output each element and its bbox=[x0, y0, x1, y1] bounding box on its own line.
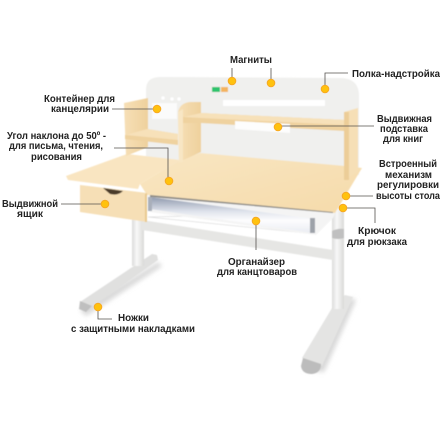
orange tag bbox=[221, 87, 228, 92]
crossbar bbox=[142, 220, 333, 260]
label: hook: Крючок bbox=[358, 226, 397, 237]
callout lines bbox=[61, 68, 375, 319]
label: tilt angle: для письма, чтения, bbox=[9, 141, 103, 152]
label: tilt angle: рисования bbox=[31, 152, 82, 163]
foot shadows bbox=[80, 262, 356, 372]
left shelf side bbox=[124, 98, 148, 156]
white container bbox=[152, 103, 177, 119]
magnet dots bbox=[161, 96, 181, 101]
right leg and foot bbox=[301, 205, 353, 374]
label: book stand: для книг bbox=[383, 134, 423, 145]
label: hook: для рюкзака bbox=[347, 237, 407, 248]
drawer bbox=[80, 185, 147, 222]
desk top left panel bbox=[66, 154, 180, 189]
label: height mechanism: механизм bbox=[385, 170, 432, 181]
label: magnets: Магниты bbox=[230, 55, 272, 66]
right shelf side bbox=[178, 102, 201, 162]
organizer tray bbox=[148, 213, 331, 234]
back panel bbox=[146, 77, 359, 175]
label: legs bbox=[71, 313, 195, 335]
label: book stand bbox=[377, 114, 432, 145]
label: organizer bbox=[217, 257, 297, 278]
label: shelf: Полка-надстройка bbox=[352, 69, 440, 80]
right shelf leg bbox=[344, 108, 358, 180]
callout dots bbox=[94, 77, 350, 311]
white stripe bbox=[223, 100, 325, 106]
upper shelf board bbox=[183, 113, 345, 131]
label: container: канцелярии bbox=[51, 104, 109, 115]
label: height mechanism: Встроенный bbox=[379, 159, 437, 170]
label: drawer: Выдвижной bbox=[2, 199, 58, 210]
label: drawer: ящик bbox=[17, 209, 44, 220]
label: book stand: Выдвижная bbox=[377, 114, 432, 125]
middle shelf bbox=[125, 129, 178, 145]
left leg and foot bbox=[79, 218, 158, 312]
green tag bbox=[212, 87, 220, 92]
label: height mechanism bbox=[376, 159, 440, 202]
label: organizer: Органайзер bbox=[228, 257, 285, 268]
desk top right panel bbox=[140, 153, 362, 213]
label: legs: с защитными накладками bbox=[71, 324, 195, 335]
label: container: Контейнер для bbox=[44, 94, 115, 105]
label: legs: Ножки bbox=[118, 313, 149, 324]
label: height mechanism: регулировки bbox=[377, 180, 439, 191]
illustration: desk bbox=[66, 77, 362, 374]
label: hook bbox=[347, 226, 407, 248]
label: tilt angle: Угол наклона до 50º - bbox=[7, 131, 106, 142]
label: drawer bbox=[2, 199, 58, 220]
label: tilt angle bbox=[7, 131, 106, 163]
label: organizer: для канцтоваров bbox=[217, 267, 297, 278]
label: container bbox=[44, 94, 115, 115]
label: book stand: подставка bbox=[380, 124, 428, 135]
organizer bbox=[147, 195, 335, 235]
book stand bbox=[235, 121, 290, 133]
